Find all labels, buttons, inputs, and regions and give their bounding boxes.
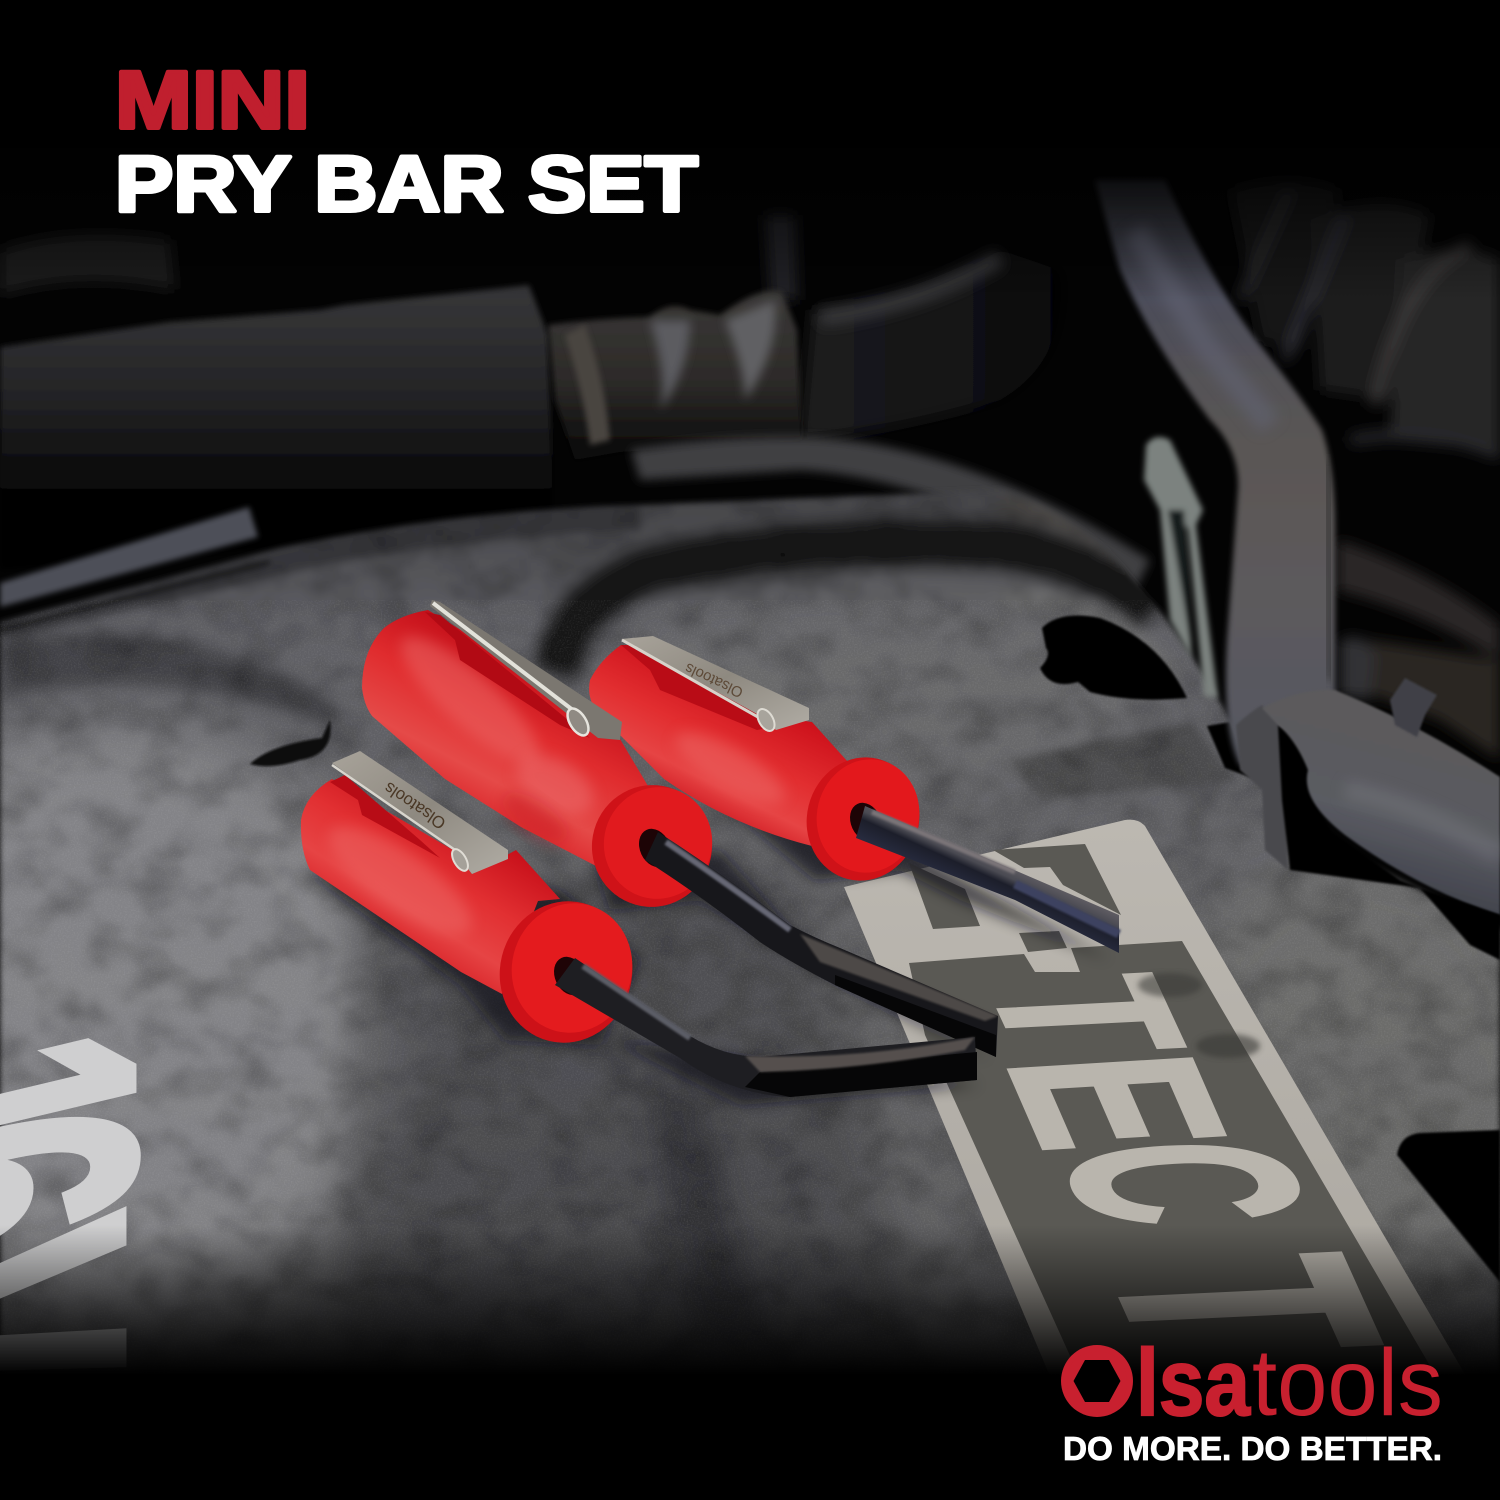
cover: mottled wear texture [0, 496, 1500, 1322]
title line: MINI: MINI [115, 55, 310, 146]
pipe: highlight along upper run [1135, 230, 1270, 425]
logo: tagline: DO MORE. DO BETTER. [1063, 1430, 1442, 1467]
back tool: handle body [589, 645, 848, 846]
nameplate: raised letters: T [934, 969, 1237, 1059]
middle tool: handle body [362, 610, 648, 866]
middle tool: head [578, 771, 726, 921]
front tool: handle body [301, 779, 560, 994]
nameplate: raised letters: T [1032, 1248, 1455, 1360]
cover: right rectangular opening [1397, 1130, 1500, 1282]
ECOTEC nameplate [844, 820, 1480, 1400]
nameplate: raised letters [934, 969, 1455, 1360]
middle tool: handle highlights [386, 620, 554, 780]
cover: small slot at left [250, 720, 331, 766]
middle tool: steel pocket clip [430, 600, 622, 740]
back tool: head [794, 745, 932, 893]
tool: front pry bar with bent blade [301, 751, 977, 1097]
front tool: head [485, 887, 647, 1057]
back tool: shaft and blade [856, 806, 1119, 953]
tool shadows [305, 760, 1110, 1105]
pipe: shadow slot [1278, 725, 1420, 888]
nameplate: dark inset blocks [909, 844, 1450, 1400]
cover: fine grain [0, 600, 1500, 1299]
front tool: shaft and blade [555, 958, 977, 1097]
logo: wordmark [1136, 1330, 1443, 1436]
front tool: steel pocket clip: Olsatools [381, 778, 449, 833]
background: left trim strip [0, 507, 258, 607]
front tool: clip slot [330, 775, 440, 858]
metal fork clip [1144, 437, 1218, 698]
front tool: steel pocket clip [332, 751, 508, 874]
background photo: engine bay [0, 180, 1500, 1369]
nameplate: raised letters: E [949, 1046, 1285, 1158]
dark gap right of pipe [1420, 888, 1500, 960]
back tool: steel pocket clip [621, 636, 809, 734]
back tool: clip slot [621, 645, 800, 730]
background: dark upper hoses and bellows [0, 180, 1500, 760]
brand logo [1061, 1330, 1443, 1467]
pipe: highlight on lower run [1345, 790, 1500, 855]
logo: wordmark: lsa [1136, 1330, 1251, 1436]
cover: lit left area [0, 720, 400, 1320]
embossed 16V lettering [0, 993, 225, 1459]
tool: back pry bar with straight blade [589, 636, 1119, 953]
cover: recessed centre shading [333, 872, 896, 1312]
background: corrugated rubber boot [548, 250, 1061, 460]
top dark vignette [0, 0, 1500, 300]
bolt stub on right [1390, 678, 1437, 737]
background: large insulated hose [0, 250, 1061, 570]
title [115, 55, 698, 228]
cover: curved moulded rib [556, 543, 1155, 672]
background: curved ridge behind cover [631, 437, 1150, 600]
pipe: lower run [1262, 690, 1500, 915]
front tool: handle highlight [314, 808, 486, 952]
middle tool: shaft and blade [645, 832, 998, 1057]
cover: dark opening behind plug [1040, 616, 1187, 700]
engine cover panel [0, 491, 1500, 1362]
logo: hexagon O: O [1064, 1335, 1130, 1431]
middle tool: clip slot [425, 612, 590, 738]
bottom dark vignette [0, 1225, 1500, 1375]
logo: wordmark: tools [1252, 1330, 1443, 1436]
coolant pipe [1095, 180, 1500, 915]
nameplate: raised letters: C [988, 1133, 1378, 1233]
tool: middle pry bar with angled blade [362, 600, 998, 1057]
pipe: shading along vertical run [1327, 460, 1330, 680]
nameplate: oil smudges [1138, 973, 1202, 997]
title line: PRY BAR SET: PRY BAR SET [115, 139, 698, 228]
cover: black gap by pipe [1207, 722, 1252, 778]
pipe: mounting bracket [1236, 705, 1290, 870]
back tool: steel pocket clip: Olsatools [682, 659, 746, 701]
back tool: handle highlight [666, 720, 794, 816]
